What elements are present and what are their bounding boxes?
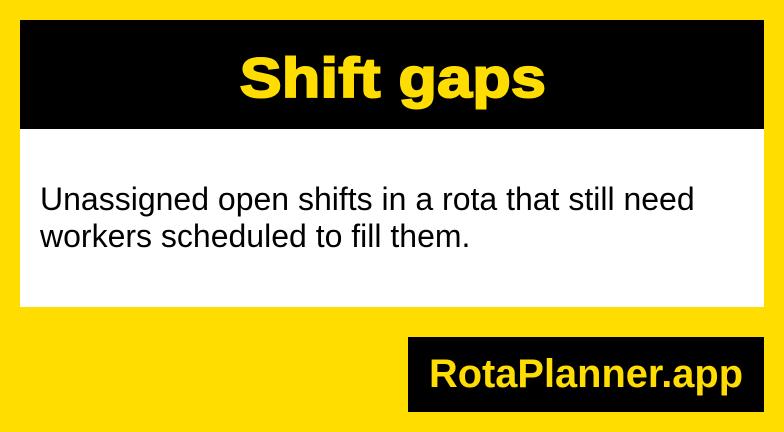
definition text: workers scheduled to fill them. <box>40 218 470 254</box>
definition text: Unassigned open shifts in a rota that still need <box>40 181 695 217</box>
panel: definition <box>20 129 764 307</box>
brand badge: RotaPlanner.app <box>429 352 743 396</box>
header band <box>20 20 764 129</box>
definition text <box>40 181 695 254</box>
title: Shift gaps <box>239 46 546 109</box>
brand badge <box>408 337 764 412</box>
